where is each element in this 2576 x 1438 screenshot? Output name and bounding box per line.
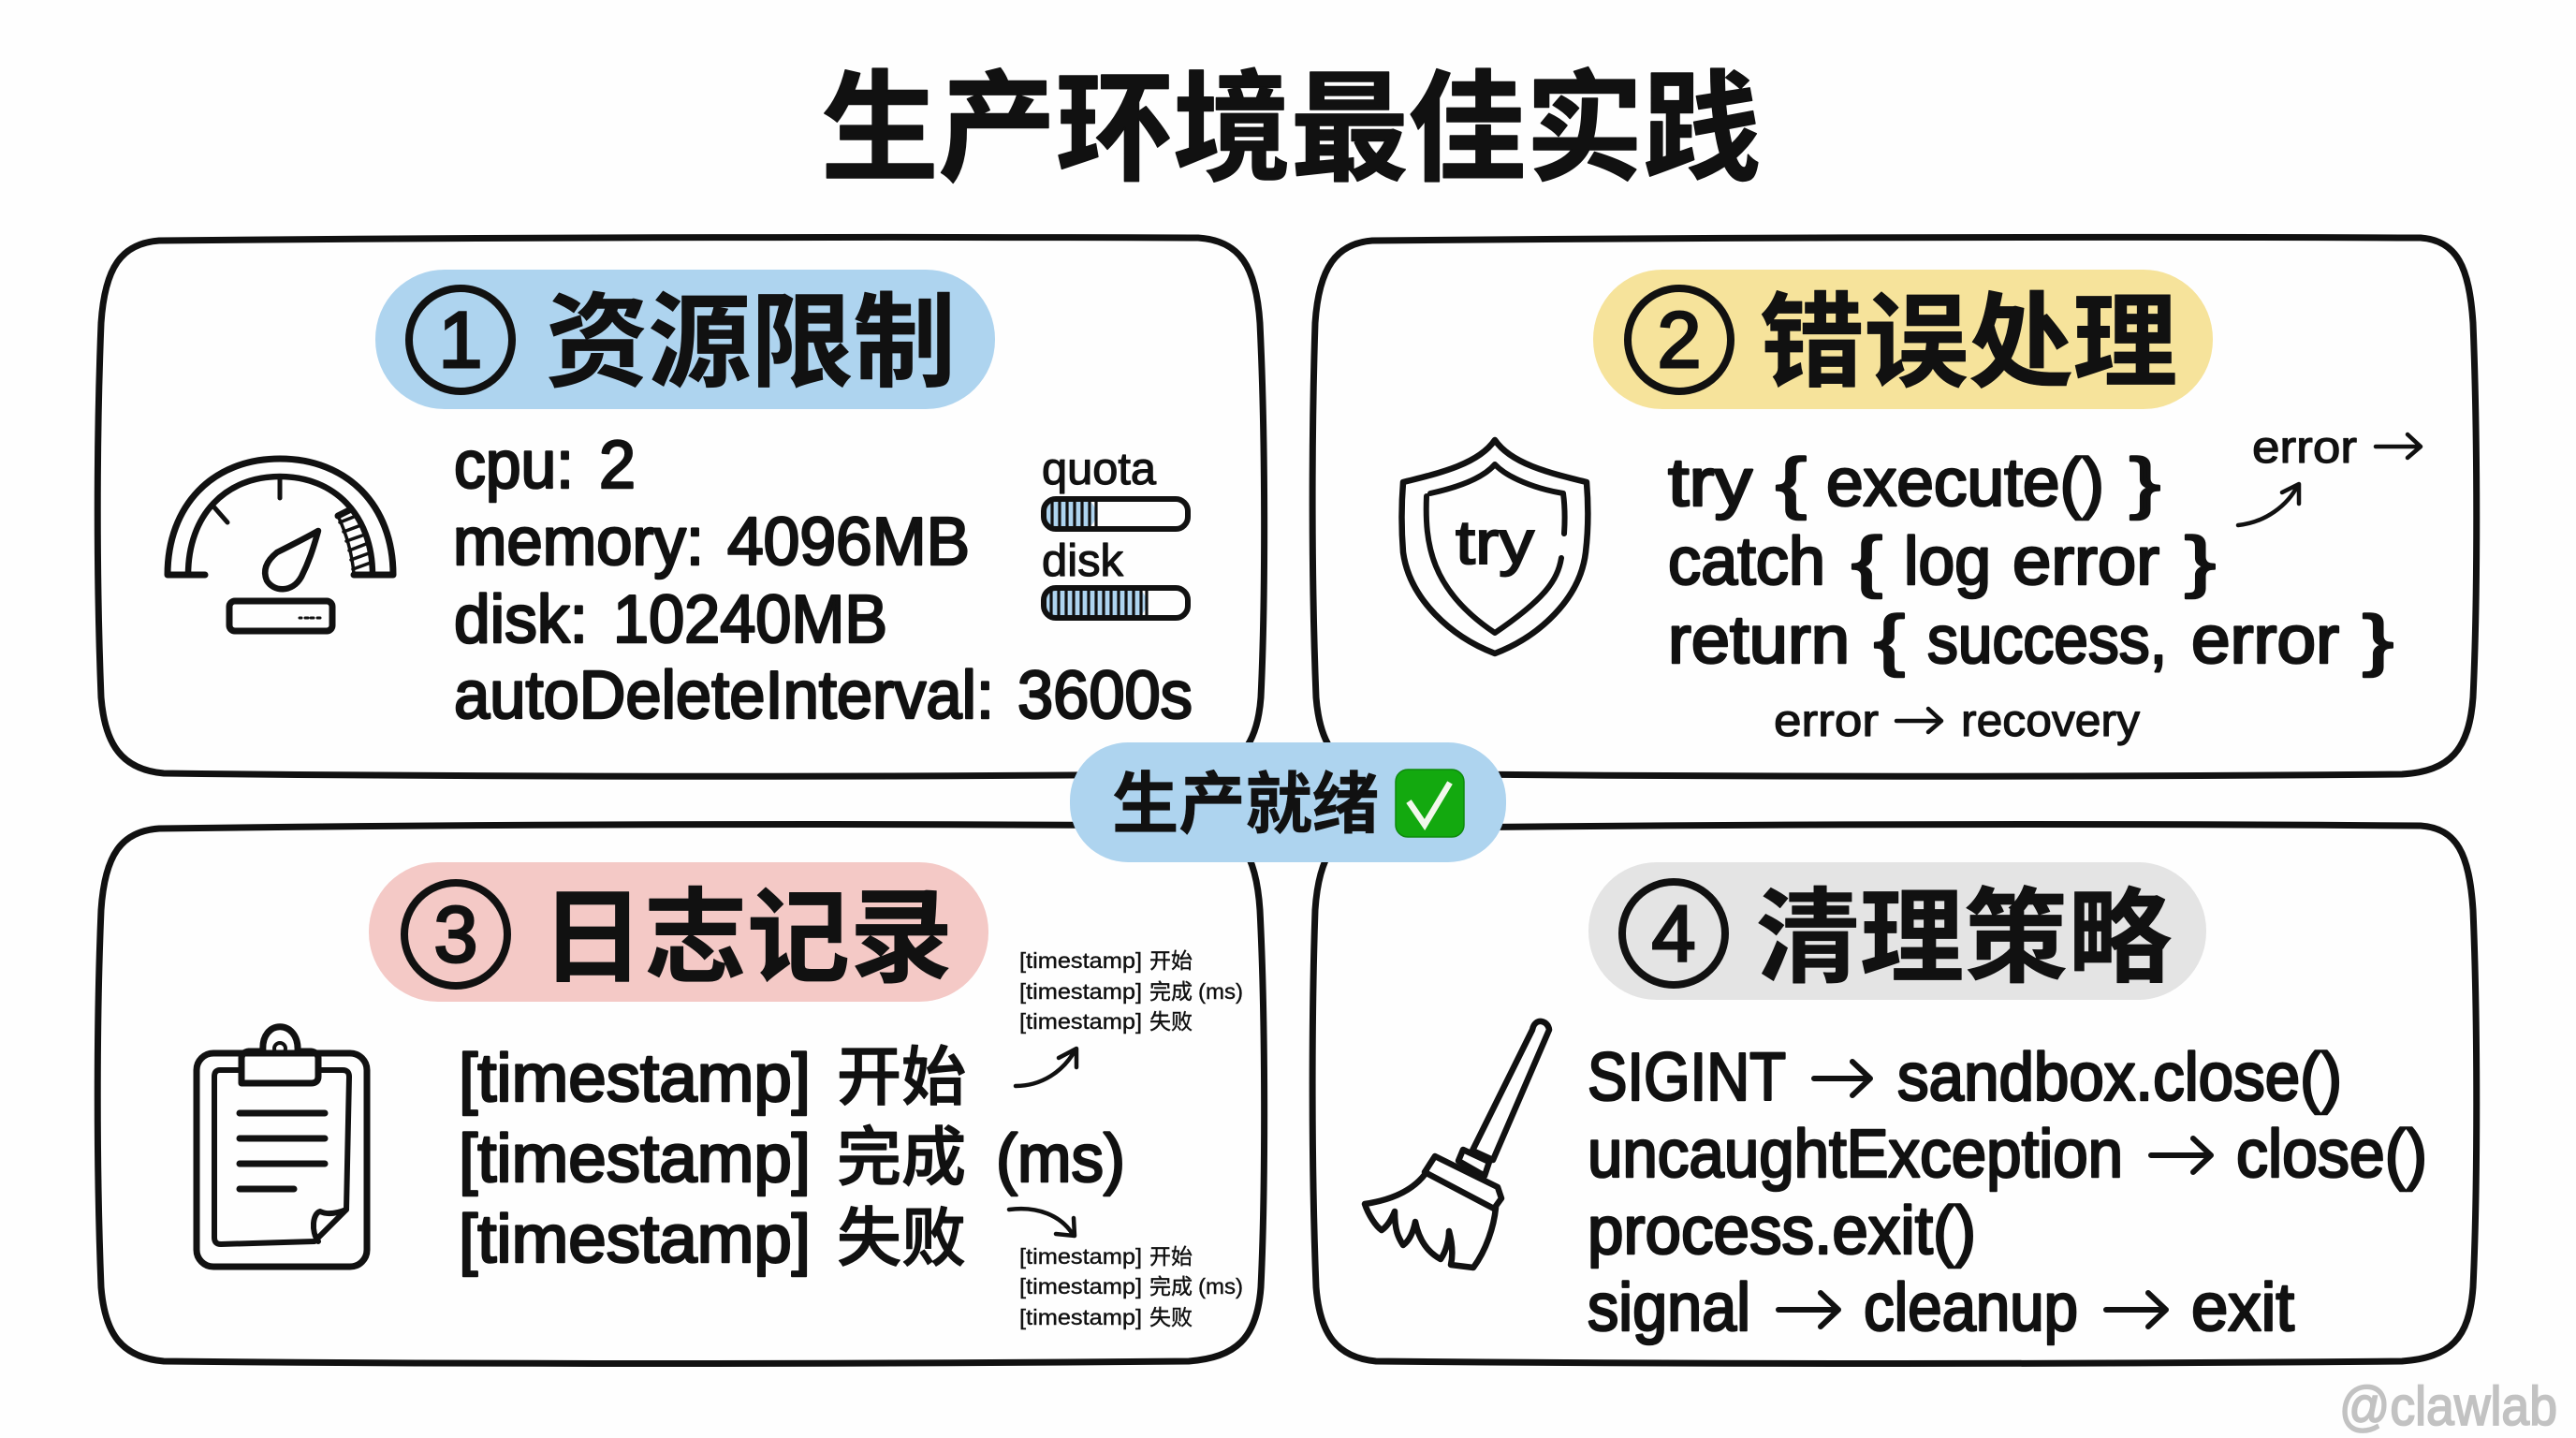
text: log lines: [timestamp]: [459, 1202, 811, 1277]
heading pill: error handling: 错误处理: [1760, 258, 2177, 408]
text: log lines: 开始: [837, 1024, 966, 1118]
small log sample: bottom: 失败: [1149, 1305, 1193, 1329]
text: try catch return code: [1668, 446, 2393, 678]
panel 4 border: [1312, 825, 2477, 1363]
heading pill: error handling: 2: [1658, 296, 1701, 384]
text: log lines: (ms): [996, 1122, 1125, 1196]
small log sample: top: (ms): [1198, 979, 1243, 1004]
small log sample: top: [1019, 948, 1243, 1034]
text: log lines: [timestamp]: [459, 1041, 811, 1116]
heading pill: cleanup strategy: 4: [1652, 889, 1695, 977]
heading pill: logging: [369, 854, 988, 1004]
text: resource config values: 10240MB: [613, 582, 887, 657]
line: uncaughtException to close: uncaughtException: [1588, 1117, 2123, 1192]
text: resource config values: memory:: [453, 505, 704, 580]
small log sample: top: [timestamp]: [1019, 948, 1142, 973]
heading pill: logging: 日志记录: [541, 854, 953, 1004]
line: process exit: process.exit(): [1588, 1194, 1976, 1269]
text: resource config values: autoDeleteInterval:: [454, 658, 994, 733]
text: error recovery: recovery: [1961, 697, 2140, 746]
small log sample: top: 开始: [1149, 948, 1193, 973]
text: try catch return code: error: [2191, 603, 2339, 678]
small log sample: bottom: [1019, 1244, 1243, 1329]
text: try catch return code: execute(): [1826, 446, 2104, 521]
text: log lines: 失败: [837, 1185, 966, 1279]
label with arrow: error: error: [2252, 423, 2357, 473]
heading pill: error handling: [1593, 258, 2213, 409]
disk progress bar: [1042, 536, 1188, 618]
text: try catch return code: {: [1874, 603, 1905, 678]
line: uncaughtException to close: [1588, 1117, 2427, 1192]
text: error recovery: [1774, 697, 2140, 746]
text: signal cleanup flow: [1588, 1040, 2427, 1345]
text: try catch return code: }: [2185, 524, 2216, 599]
text: try catch return code: success,: [1927, 603, 2167, 678]
icon: speedometer gauge: [168, 459, 393, 631]
text: resource config values: 4096MB: [727, 505, 970, 580]
text: log lines: [timestamp]: [459, 1122, 811, 1196]
line: SIGINT to sandbox close: [1588, 1040, 2342, 1115]
line: uncaughtException to close: close(): [2236, 1117, 2427, 1192]
text: try catch return code: return: [1668, 603, 1850, 678]
line: signal cleanup exit: [1588, 1270, 2294, 1345]
panel 1 border: [97, 237, 1265, 776]
small log sample: bottom: (ms): [1198, 1274, 1243, 1299]
text: try catch return code: {: [1852, 524, 1882, 599]
heading pill: resource limits: 资源限制: [546, 258, 956, 408]
text: try catch return code: log: [1904, 524, 1991, 599]
text: try catch return code: catch: [1668, 524, 1825, 599]
text: resource config values: cpu:: [454, 428, 574, 503]
curved arrow up: [1016, 1049, 1076, 1086]
center badge: production ready: 生产就绪: [1112, 749, 1379, 847]
heading pill: resource limits: 1: [439, 296, 482, 384]
text: error recovery: error: [1774, 697, 1879, 746]
text: log lines: [459, 1024, 1125, 1279]
text: resource config values: 2: [599, 428, 636, 503]
heading pill: resource limits: [375, 258, 995, 409]
panel 3 border: [97, 825, 1265, 1363]
heading pill: cleanup strategy: 清理策略: [1756, 854, 2172, 1004]
line: signal cleanup exit: signal: [1588, 1270, 1750, 1345]
icon: clipboard: [197, 1027, 367, 1267]
curved arrow down: [1009, 1209, 1075, 1236]
text: log lines: 完成: [837, 1105, 966, 1198]
panel: error handling: [1312, 237, 2477, 776]
small log sample: bottom: 完成: [1149, 1274, 1193, 1299]
center badge: production ready: [1070, 742, 1506, 862]
text: try catch return code: try: [1668, 446, 1752, 521]
line: SIGINT to sandbox close: sandbox.close(): [1897, 1040, 2342, 1115]
text: try catch return code: }: [2363, 603, 2393, 678]
small log sample: bottom: 开始: [1149, 1244, 1193, 1269]
title: 生产环境最佳实践: [821, 32, 1761, 205]
small log sample: top: 完成: [1149, 979, 1193, 1004]
panel: resource limits: [97, 237, 1265, 776]
icon: shield: [1402, 440, 1588, 653]
quota progress bar: [1042, 445, 1188, 529]
small log sample: bottom: [timestamp]: [1019, 1274, 1142, 1299]
watermark: @clawlab: [2339, 1376, 2557, 1437]
quota progress bar: quota: [1042, 445, 1156, 494]
disk progress bar: disk: [1042, 536, 1124, 586]
text: resource config values: disk:: [454, 582, 588, 657]
panel: cleanup strategy: [1312, 825, 2477, 1363]
small log sample: top: [timestamp]: [1019, 979, 1142, 1004]
icon: green check mark: [1396, 770, 1464, 837]
small log sample: bottom: [timestamp]: [1019, 1244, 1142, 1269]
panel: logging: [97, 825, 1265, 1363]
icon: broom: [1365, 1021, 1549, 1268]
heading pill: cleanup strategy: [1588, 854, 2206, 1004]
line: signal cleanup exit: cleanup: [1864, 1270, 2078, 1345]
text: try catch return code: }: [2130, 446, 2160, 521]
label with arrow: error: [2252, 423, 2421, 473]
text: resource config values: 3600s: [1017, 658, 1193, 733]
small log sample: top: [timestamp]: [1019, 1009, 1142, 1034]
text: resource config values: [453, 428, 1193, 733]
line: signal cleanup exit: exit: [2191, 1270, 2294, 1345]
heading pill: logging: 3: [434, 890, 477, 978]
small log sample: top: 失败: [1149, 1009, 1193, 1034]
text: try catch return code: {: [1776, 446, 1807, 521]
small log sample: bottom: [timestamp]: [1019, 1305, 1142, 1329]
icon: shield: try: [1456, 507, 1534, 577]
panel 2 border: [1312, 237, 2477, 776]
text: try catch return code: error: [2012, 524, 2159, 599]
curved arrow to error label: [2238, 484, 2299, 525]
line: SIGINT to sandbox close: SIGINT: [1588, 1040, 1786, 1115]
